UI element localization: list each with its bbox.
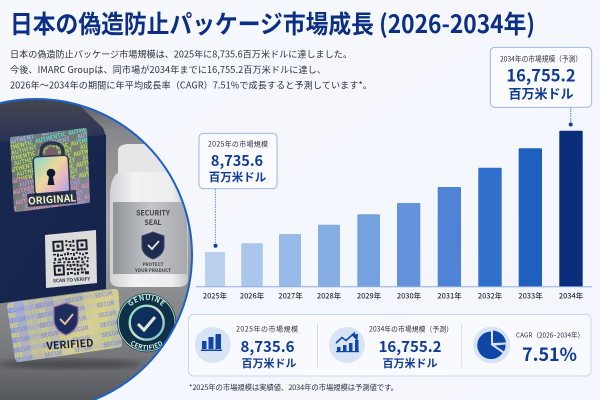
stat: CAGR — [473, 326, 584, 367]
icon: rising chart — [329, 327, 365, 363]
hologram sticker: verified — [7, 289, 122, 362]
badge: genuine certified: GENUINE — [128, 294, 166, 306]
bottle: SECURITY — [136, 208, 171, 218]
bar: 2028 — [318, 225, 340, 287]
bar: 2034 — [559, 131, 583, 287]
bar: 2026 — [241, 243, 263, 287]
axis labels: 2029年 — [357, 291, 382, 302]
badge: genuine certified: CERTIFIED — [130, 341, 162, 350]
floor shadow — [0, 359, 142, 369]
bottle: SEAL — [144, 218, 162, 228]
bar: 2033 — [519, 148, 542, 287]
icon: bar chart — [195, 327, 231, 363]
stat: 2025 — [195, 324, 298, 371]
axis labels: 2031年 — [437, 291, 462, 302]
hologram sticker: verified: VERIFIED — [45, 335, 94, 354]
bar chart — [196, 131, 592, 302]
photo: anti-counterfeit packaging circle — [0, 98, 193, 400]
hologram sticker: original: ORIGINAL — [28, 189, 77, 208]
bar: 2032 — [478, 168, 502, 287]
panel: summary stats — [188, 314, 591, 376]
intro text block: 日本の偽造防止パッケージ市場規模は、2025年に8,735.6百万米ドルに達しました。 — [10, 46, 352, 60]
bottle: YOUR PRODUCT — [134, 268, 171, 274]
callout: 2034 market size forecast: 2034年の市場規模（予測） — [500, 54, 582, 64]
intro text block: 今後、IMARC Groupは、同市場が2034年までに16,755.2百万米ドルに達し、 — [10, 62, 326, 76]
stat: 2025: 8,735.6 — [240, 336, 295, 357]
box — [0, 98, 106, 304]
stat: 2025: 百万米ドル — [242, 355, 296, 371]
axis labels: 2034年 — [559, 291, 584, 302]
callout: 2034 market size forecast — [490, 47, 592, 126]
stat: 2034: 百万米ドル — [382, 355, 438, 371]
intro text block: 2026年～2034年の期間に年平均成長率（CAGR）7.51%で成長すると予測しています*。 — [10, 78, 372, 92]
stat: 2034: 2034年の市場規模（予測） — [369, 324, 453, 334]
icon: pie chart — [473, 326, 510, 364]
bottle — [110, 144, 188, 287]
bar: 2025 — [205, 252, 225, 287]
callout: 2034 market size forecast: 16,755.2 — [506, 63, 576, 87]
axis labels: 2025年 — [203, 291, 228, 302]
QR label: SCAN TO VERIFY — [53, 276, 90, 284]
hologram sticker: original — [8, 126, 92, 214]
stat: 2025: 2025年の市場規模 — [236, 324, 298, 334]
axis labels: 2032年 — [478, 291, 503, 302]
axis labels: 2030年 — [397, 291, 422, 302]
callout: 2025 market size — [199, 133, 277, 248]
bottle: PROTECT — [142, 262, 164, 268]
stat: 2034 — [329, 324, 453, 371]
stat: CAGR: 7.51% — [522, 341, 577, 367]
axis labels: 2027年 — [278, 291, 303, 302]
intro text block — [10, 46, 372, 92]
bar: 2027 — [279, 234, 301, 287]
callout: 2034 market size forecast: 百万米ドル — [508, 83, 574, 102]
stat: 2034: 16,755.2 — [379, 336, 442, 357]
axis labels: 2028年 — [317, 291, 342, 302]
axis labels: 2026年 — [240, 291, 265, 302]
axis labels — [203, 291, 584, 302]
callout: 2025 market size: 百万米ドル — [209, 169, 267, 185]
callout: 2025 market size: 8,735.6 — [211, 150, 263, 171]
bar: 2031 — [438, 187, 461, 287]
stat: CAGR: CAGR（2026–2034年） — [516, 330, 584, 340]
footnote: *2025年の市場規模は実績値、2034年の市場規模は予測値です。 — [189, 382, 398, 393]
title: 日本の偽造防止パッケージ市場成長 (2026-2034年) — [10, 5, 535, 41]
callout: 2025 market size: 2025年の市場規模 — [208, 139, 268, 149]
bar: 2029 — [357, 214, 380, 287]
bar: 2030 — [397, 203, 420, 287]
badge: genuine certified — [117, 293, 176, 352]
QR label — [45, 230, 97, 288]
axis labels: 2033年 — [518, 291, 543, 302]
